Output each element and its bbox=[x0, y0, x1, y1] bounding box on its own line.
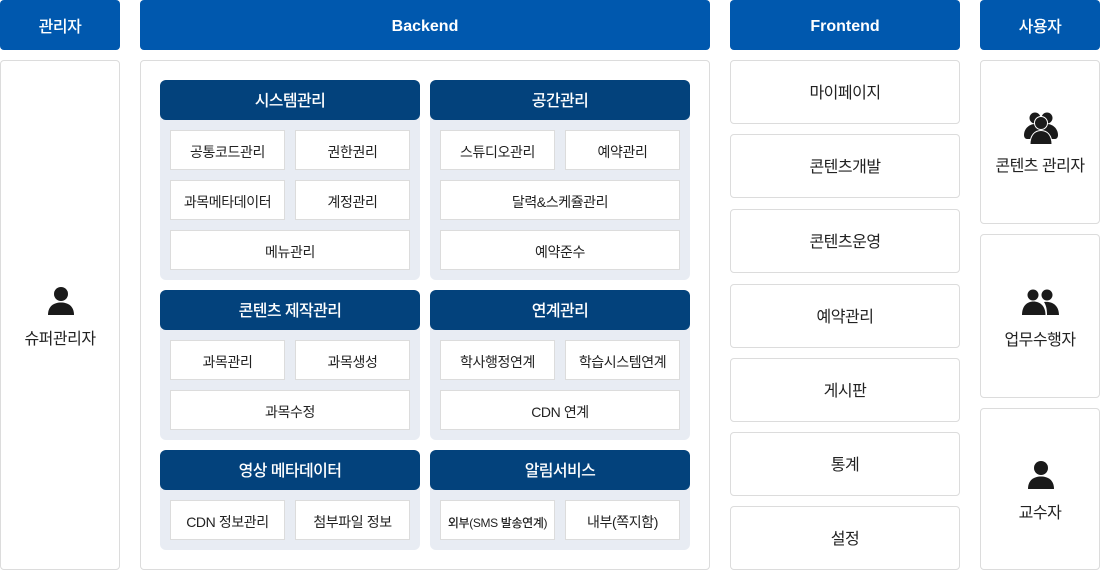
header: Frontend: Frontend bbox=[810, 18, 880, 35]
icon: single person bbox=[1028, 461, 1054, 489]
item: CDN 정보관리 bbox=[186, 514, 269, 530]
header: Frontend bbox=[730, 0, 960, 50]
header: 사용자: 사용자 bbox=[1019, 19, 1061, 36]
item: 외부(SMS 발송연계) bbox=[448, 516, 547, 530]
panel: 업무수행자 bbox=[980, 234, 1100, 398]
header: 관리자: 관리자 bbox=[39, 19, 81, 36]
item bbox=[170, 390, 410, 430]
group: 공간관리 bbox=[430, 80, 690, 280]
item bbox=[440, 130, 555, 170]
frontend row bbox=[730, 506, 960, 570]
panel: 콘텐츠 관리자 bbox=[980, 60, 1100, 224]
item bbox=[295, 180, 410, 220]
item bbox=[440, 340, 555, 380]
panel: Backend bbox=[140, 60, 710, 570]
group heading bbox=[160, 450, 420, 490]
frontend row bbox=[730, 60, 960, 124]
item: 과목관리 bbox=[203, 354, 252, 370]
item: 권한권리 bbox=[328, 144, 377, 160]
frontend row: 마이페이지 bbox=[809, 85, 881, 102]
item: 내부(쪽지함) bbox=[587, 514, 658, 530]
header: 관리자 bbox=[0, 0, 120, 50]
item bbox=[565, 130, 680, 170]
panel: 교수자 bbox=[980, 408, 1100, 570]
frontend row bbox=[730, 358, 960, 422]
item: 공통코드관리 bbox=[190, 144, 265, 160]
frontend row bbox=[730, 432, 960, 496]
item: 과목생성 bbox=[328, 354, 377, 370]
item bbox=[295, 340, 410, 380]
frontend row bbox=[730, 209, 960, 273]
header: 사용자 bbox=[980, 0, 1100, 50]
group heading: 영상 메타데이터 bbox=[239, 463, 341, 480]
label: 슈퍼관리자: 슈퍼관리자 bbox=[24, 331, 96, 348]
group: 시스템관리 bbox=[160, 80, 420, 280]
item: 메뉴관리 bbox=[265, 244, 315, 260]
frontend row bbox=[730, 134, 960, 198]
item bbox=[295, 130, 410, 170]
group heading: 알림서비스 bbox=[525, 463, 595, 480]
header: Backend: Backend bbox=[392, 18, 458, 35]
item bbox=[295, 500, 410, 540]
item: 과목수정 bbox=[265, 404, 315, 420]
group: 영상 메타데이터 bbox=[160, 450, 420, 550]
frontend row: 게시판 bbox=[824, 383, 866, 400]
item: 첨부파일 정보 bbox=[313, 514, 392, 530]
group heading: 시스템관리 bbox=[255, 93, 325, 110]
item bbox=[170, 130, 285, 170]
frontend row bbox=[730, 284, 960, 348]
item bbox=[565, 500, 680, 540]
group heading bbox=[160, 290, 420, 330]
panel: 관리자 bbox=[0, 60, 120, 570]
item bbox=[170, 230, 410, 270]
item bbox=[565, 340, 680, 380]
label: 업무수행자: 업무수행자 bbox=[1004, 332, 1076, 349]
item: 계정관리 bbox=[328, 194, 377, 210]
item: 스튜디오관리 bbox=[460, 144, 535, 160]
item bbox=[440, 230, 680, 270]
frontend row: 콘텐츠개발 bbox=[809, 159, 881, 176]
icon: single person bbox=[48, 287, 74, 315]
frontend row: 통계 bbox=[831, 457, 859, 474]
item bbox=[170, 500, 285, 540]
item bbox=[170, 340, 285, 380]
icon: group of three people bbox=[1024, 112, 1058, 144]
item: CDN 연계 bbox=[531, 404, 589, 420]
group: 콘텐츠 제작관리 bbox=[160, 290, 420, 440]
item: 학습시스템연계 bbox=[579, 354, 666, 370]
item: 달력&스케쥴관리 bbox=[512, 194, 608, 210]
item bbox=[440, 180, 680, 220]
item bbox=[440, 500, 555, 540]
frontend row: 콘텐츠운영 bbox=[809, 234, 881, 251]
group heading: 콘텐츠 제작관리 bbox=[239, 303, 341, 320]
frontend row: 설정 bbox=[831, 531, 859, 548]
group heading: 공간관리 bbox=[532, 93, 588, 110]
item bbox=[170, 180, 285, 220]
frontend row: 예약관리 bbox=[817, 309, 873, 326]
item: 학사행정연계 bbox=[460, 354, 535, 370]
label: 교수자: 교수자 bbox=[1019, 505, 1061, 522]
icon: two people bbox=[1022, 290, 1059, 315]
label: 콘텐츠 관리자: 콘텐츠 관리자 bbox=[995, 158, 1085, 175]
group: 연계관리 bbox=[430, 290, 690, 440]
group heading bbox=[430, 450, 690, 490]
group: 알림서비스 bbox=[430, 450, 690, 550]
group heading bbox=[430, 290, 690, 330]
item bbox=[440, 390, 680, 430]
group heading bbox=[160, 80, 420, 120]
group heading bbox=[430, 80, 690, 120]
item: 예약관리 bbox=[598, 144, 647, 160]
item: 예약준수 bbox=[535, 244, 585, 260]
header: Backend bbox=[140, 0, 710, 50]
item: 과목메타데이터 bbox=[184, 194, 271, 210]
group heading: 연계관리 bbox=[532, 303, 588, 320]
